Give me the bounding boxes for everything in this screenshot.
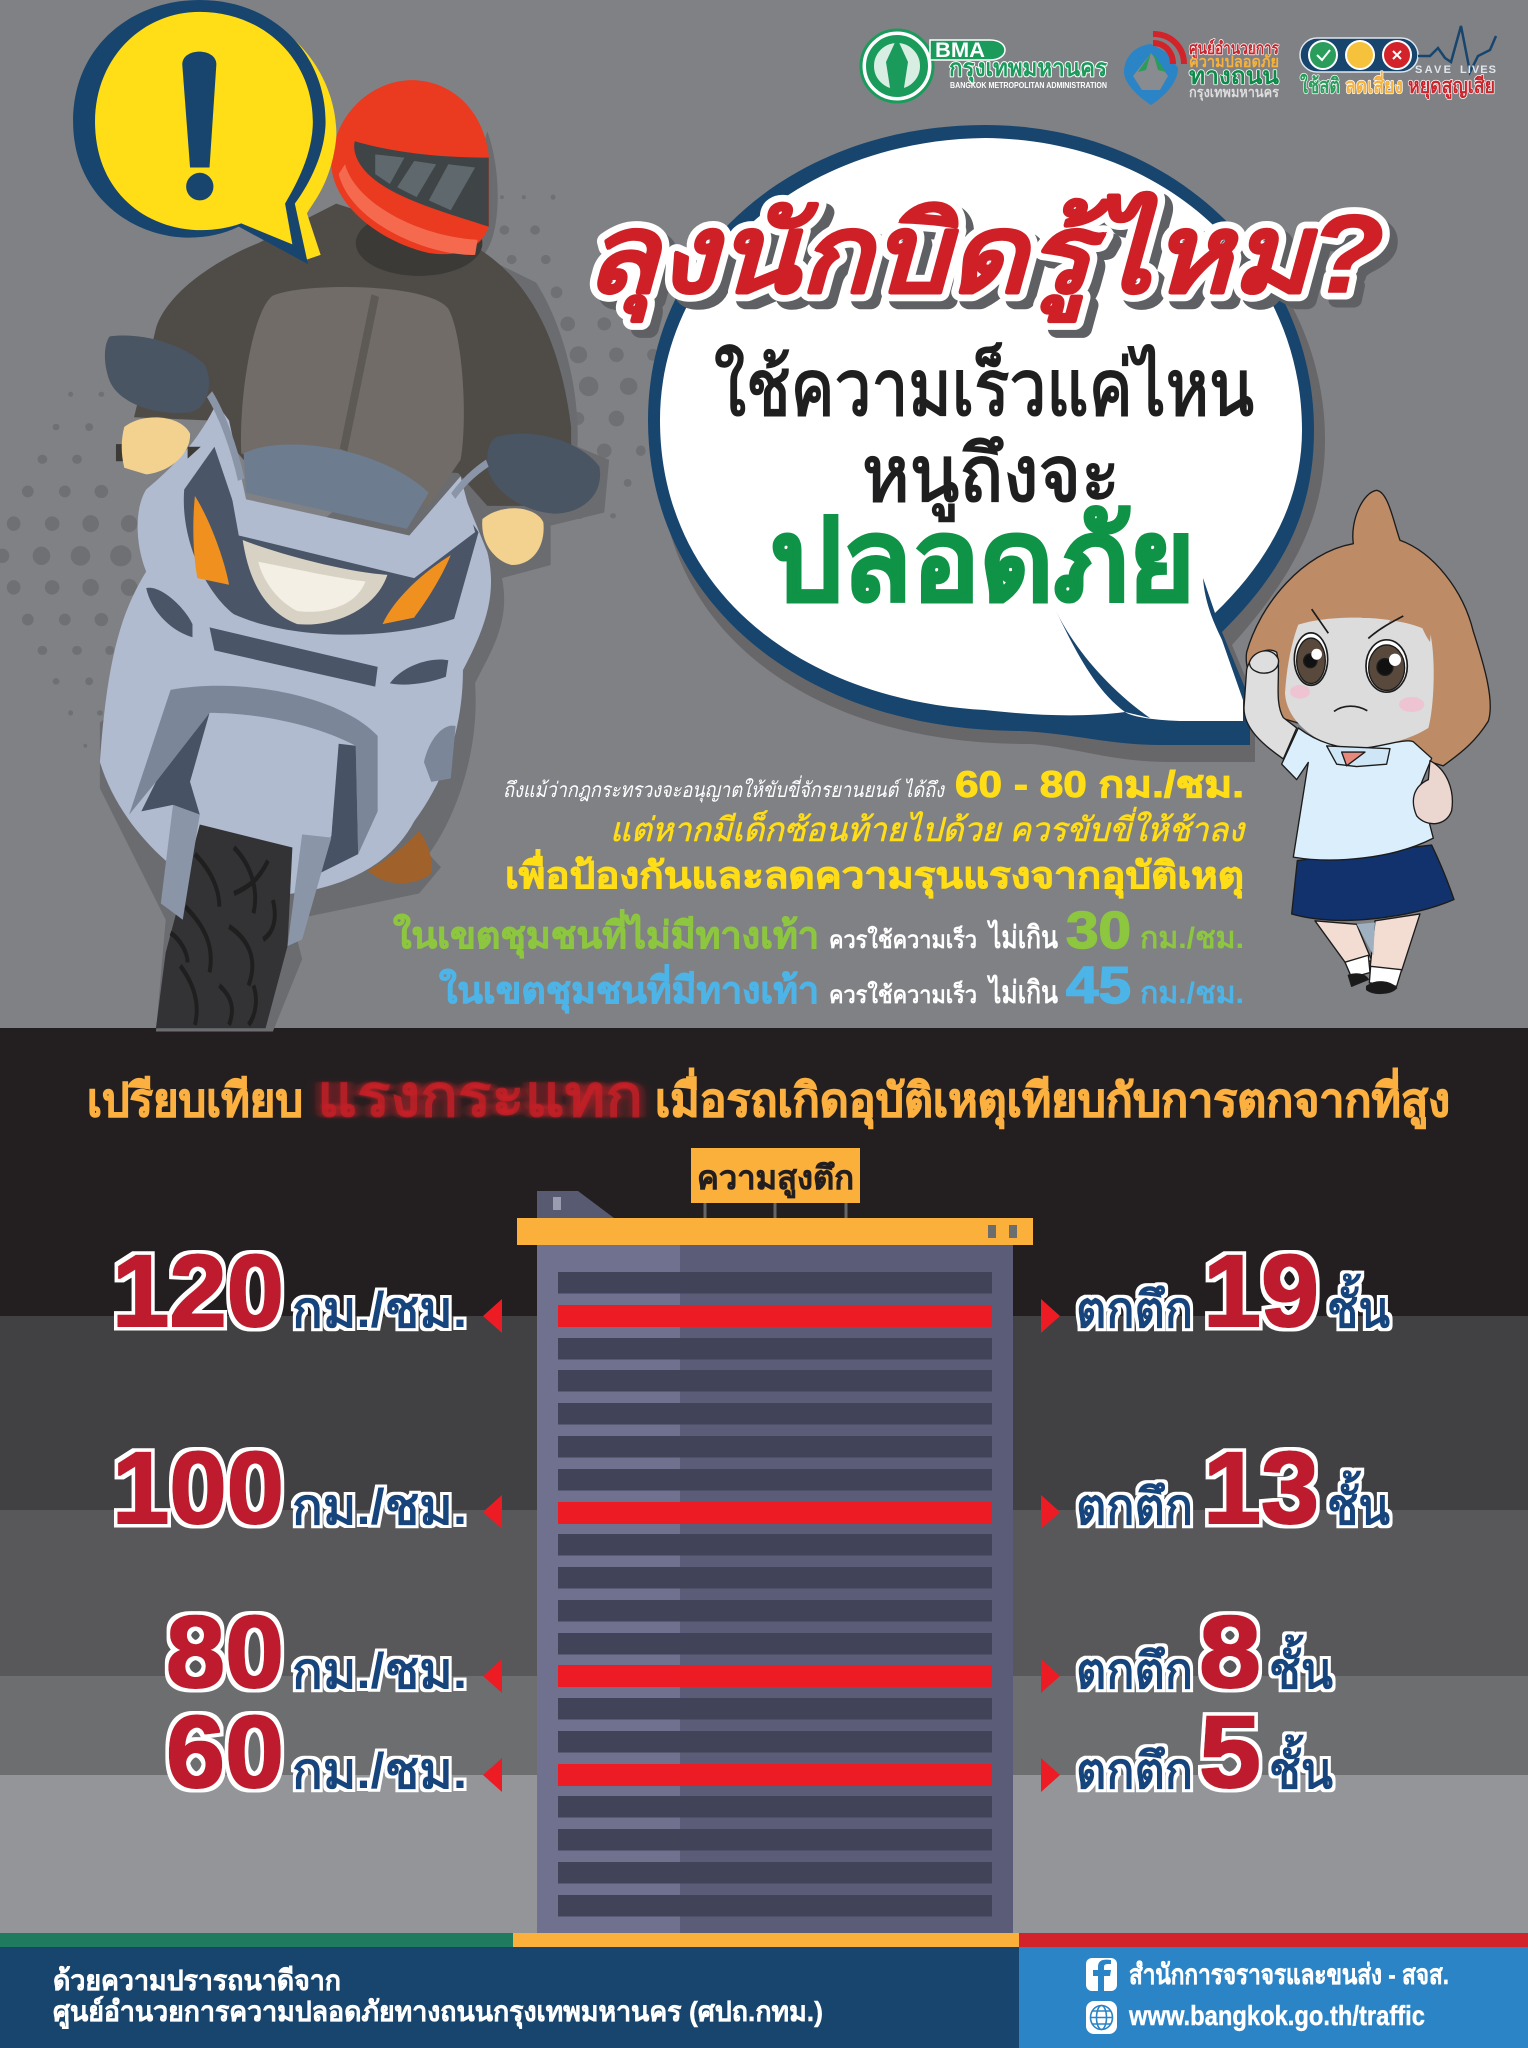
icon: globe bbox=[1086, 2001, 1117, 2034]
row: 100 km/h equals 13 floors: กม./ชม. bbox=[292, 1479, 467, 1535]
logo: road safety centre bbox=[1124, 34, 1280, 105]
logo: save lives: ลดเสี่ยง bbox=[1345, 70, 1403, 98]
logo: road safety centre: ศูนย์อำนวยการ bbox=[1189, 38, 1280, 60]
text block: speed advice: ถึงแม้ว่ากฎกระทรวงจะอนุญาตให้ขับขี่จักรยานยนต์ ได้ถึง bbox=[503, 775, 946, 803]
bubble question text: หนูถึงจะ bbox=[862, 430, 1120, 521]
contact details: www.bangkok.go.th/traffic bbox=[1128, 2000, 1425, 2031]
logo: save lives bbox=[1300, 26, 1496, 100]
text block: speed advice: ไม่เกิน bbox=[987, 974, 1058, 1010]
logos bbox=[861, 26, 1496, 105]
tire bbox=[156, 825, 292, 1028]
shirt bbox=[1282, 728, 1433, 860]
text block: speed advice: ในเขตชุมชนที่ไม่มีทางเท้า bbox=[393, 909, 819, 959]
hand left bbox=[122, 417, 190, 474]
eyebrows bbox=[1312, 609, 1403, 638]
bubble question text: ปลอดภัย bbox=[770, 497, 1195, 625]
text block: speed advice: แต่หากมีเด็กซ้อนท้ายไปด้วย ควรขับขี่ให้ช้าลง bbox=[610, 807, 1247, 848]
heading: เปรียบเทียบ bbox=[87, 1074, 303, 1126]
row: 120 km/h equals 19 floors: 19 bbox=[1203, 1234, 1319, 1348]
grille bbox=[210, 627, 378, 687]
building sign bbox=[691, 1148, 860, 1203]
eye left bbox=[1294, 633, 1328, 685]
side vents bbox=[146, 588, 448, 685]
text block: speed advice: 30 bbox=[1066, 902, 1131, 960]
highlighted floors bbox=[558, 1305, 992, 1786]
row: 120 km/h equals 19 floors: ชั้น bbox=[1327, 1273, 1390, 1338]
row: 60 km/h equals 5 floors bbox=[166, 1695, 1333, 1809]
roof bbox=[517, 1218, 1033, 1245]
text block: speed advice bbox=[393, 764, 1247, 1015]
blush bbox=[1290, 685, 1424, 712]
helmet bbox=[331, 80, 490, 276]
row: 80 km/h equals 8 floors bbox=[166, 1595, 1333, 1709]
hair back bbox=[1246, 490, 1490, 766]
halftone dots and motorcycle illustration bbox=[0, 0, 659, 1031]
background top panel bbox=[0, 0, 1528, 1028]
mirror left bbox=[105, 335, 209, 413]
logo: save lives: หยุดสูญเสีย bbox=[1408, 74, 1495, 100]
row: 60 km/h equals 5 floors: กม./ชม. bbox=[292, 1743, 467, 1799]
row: 120 km/h equals 19 floors: กม./ชม. bbox=[292, 1282, 467, 1338]
row: 100 km/h equals 13 floors: 13 bbox=[1203, 1431, 1319, 1545]
building sign: ความสูงตึก bbox=[697, 1159, 854, 1199]
logo: road safety centre: ความปลอดภัย bbox=[1189, 53, 1279, 71]
row: 120 km/h equals 19 floors: ตกตึก bbox=[1076, 1282, 1193, 1338]
fender bbox=[190, 719, 337, 836]
jacket bbox=[134, 204, 571, 506]
text block: speed advice: เพื่อป้องกันและลดความรุนแรงจากอุบัติเหตุ bbox=[505, 849, 1244, 899]
mirror right bbox=[487, 434, 600, 514]
fringe bbox=[1298, 559, 1431, 642]
text block: speed advice: 45 bbox=[1066, 957, 1131, 1015]
hand on hip bbox=[1413, 761, 1452, 824]
row: 60 km/h equals 5 floors: ตกตึก bbox=[1076, 1743, 1193, 1799]
raised fist bbox=[1249, 651, 1279, 673]
heading highlight: impact force: แรงกระแทก bbox=[317, 1064, 643, 1129]
text block: speed advice: ควรใช้ความเร็ว bbox=[829, 925, 977, 954]
contact details: สำนักการจราจรและขนส่ง - สจส. bbox=[1129, 1959, 1449, 1990]
boot bbox=[368, 831, 432, 883]
row: 100 km/h equals 13 floors: ตกตึก bbox=[1076, 1479, 1193, 1535]
indicator right bbox=[383, 555, 451, 624]
footer message bbox=[53, 1965, 823, 2029]
logo: BMA: BANGKOK METROPOLITAN ADMINISTRATION bbox=[950, 81, 1107, 90]
row: 100 km/h equals 13 floors: ชั้น bbox=[1327, 1470, 1390, 1535]
title: ลุงนักบิดรู้ไหม? bbox=[584, 191, 1384, 323]
text block: speed advice: ในเขตชุมชนที่มีทางเท้า bbox=[439, 964, 819, 1014]
legs bbox=[1315, 914, 1420, 971]
icon: motorcycle rider bbox=[100, 80, 609, 1031]
windscreen bbox=[244, 444, 429, 529]
row: 60 km/h equals 5 floors: 60 bbox=[166, 1695, 284, 1809]
title: ลุงนักบิดรู้ไหม? bbox=[584, 191, 1384, 323]
text block: speed advice: กม./ชม. bbox=[1140, 922, 1244, 955]
hand right bbox=[482, 508, 544, 565]
eye right bbox=[1366, 640, 1407, 692]
mouth bbox=[1334, 706, 1367, 711]
text block: speed advice: 60 - 80 กม./ชม. bbox=[955, 764, 1244, 805]
head area bbox=[184, 447, 479, 635]
building body bbox=[537, 1245, 680, 1933]
rider and bike shadow bbox=[100, 131, 609, 1031]
row: 80 km/h equals 8 floors: กม./ชม. bbox=[292, 1643, 467, 1699]
footer message: ศูนย์อำนวยการความปลอดภัยทางถนนกรุงเทพมหานคร (ศปถ.กทม.) bbox=[53, 1996, 823, 2029]
chest panel bbox=[241, 287, 464, 506]
row: 60 km/h equals 5 floors: 5 bbox=[1199, 1695, 1261, 1809]
row: 120 km/h equals 19 floors: 120 bbox=[112, 1234, 284, 1348]
exclamation mark bbox=[182, 52, 216, 200]
logo: save lives: ใช้สติ bbox=[1300, 73, 1340, 98]
heading highlight: impact force: แรงกระแทก bbox=[317, 1064, 643, 1129]
fairing body bbox=[100, 407, 491, 900]
headlight bbox=[243, 540, 387, 625]
building bbox=[517, 1148, 1033, 1933]
socks and shoes bbox=[1345, 955, 1402, 993]
row: 120 km/h equals 19 floors bbox=[112, 1234, 1390, 1348]
icon: facebook bbox=[1086, 1958, 1117, 1991]
heading: เมื่อรถเกิดอุบัติเหตุเทียบกับการตกจากที่สูง bbox=[655, 1068, 1450, 1129]
logo: BMA bbox=[861, 30, 1107, 102]
heading bbox=[87, 1064, 1450, 1129]
bubble question text: ใช้ความเร็วแค่ไหน bbox=[714, 343, 1254, 432]
collar bbox=[1327, 746, 1390, 767]
row: 80 km/h equals 8 floors: 80 bbox=[166, 1595, 284, 1709]
row: 80 km/h equals 8 floors: 8 bbox=[1199, 1595, 1261, 1709]
row: 60 km/h equals 5 floors: ชั้น bbox=[1269, 1734, 1333, 1799]
handlebar left bbox=[116, 444, 201, 461]
text block: speed advice: ควรใช้ความเร็ว bbox=[829, 980, 977, 1009]
face bbox=[1285, 618, 1434, 747]
footer message: ด้วยความปรารถนาดีจาก bbox=[53, 1965, 341, 1996]
contact details bbox=[1128, 1959, 1449, 2031]
logo: BMA: กรุงเทพมหานคร bbox=[949, 55, 1107, 84]
bubble question text bbox=[714, 343, 1254, 625]
indicator left bbox=[193, 496, 229, 585]
roof structure bbox=[537, 1191, 614, 1218]
panel: comparison bands bbox=[0, 1028, 1528, 1933]
row: 100 km/h equals 13 floors: 100 bbox=[112, 1431, 284, 1545]
text block: speed advice: ไม่เกิน bbox=[987, 919, 1058, 955]
logo: save lives: SAVE bbox=[1415, 64, 1451, 76]
logo: road safety centre: กรุงเทพมหานคร bbox=[1189, 84, 1279, 101]
row: 80 km/h equals 8 floors: ตกตึก bbox=[1076, 1643, 1193, 1699]
row: 80 km/h equals 8 floors: ชั้น bbox=[1269, 1634, 1333, 1699]
lower arch bbox=[129, 686, 378, 854]
main speech bubble bbox=[648, 125, 1325, 762]
logo: save lives: LIVES bbox=[1460, 64, 1496, 76]
raised arm bbox=[1244, 650, 1297, 759]
logo: BMA: BMA bbox=[935, 39, 985, 62]
row: 100 km/h equals 13 floors bbox=[112, 1431, 1390, 1545]
logo: road safety centre: ทางถนน bbox=[1189, 63, 1280, 90]
footer bbox=[0, 1933, 1528, 2048]
icon: schoolgirl character bbox=[1244, 490, 1490, 993]
title: ลุงนักบิดรู้ไหม? bbox=[592, 199, 1392, 331]
icon: alert speech bubble bbox=[73, 0, 336, 264]
floors bbox=[558, 1272, 992, 1916]
text block: speed advice: กม./ชม. bbox=[1140, 977, 1244, 1010]
skirt bbox=[1292, 845, 1454, 920]
